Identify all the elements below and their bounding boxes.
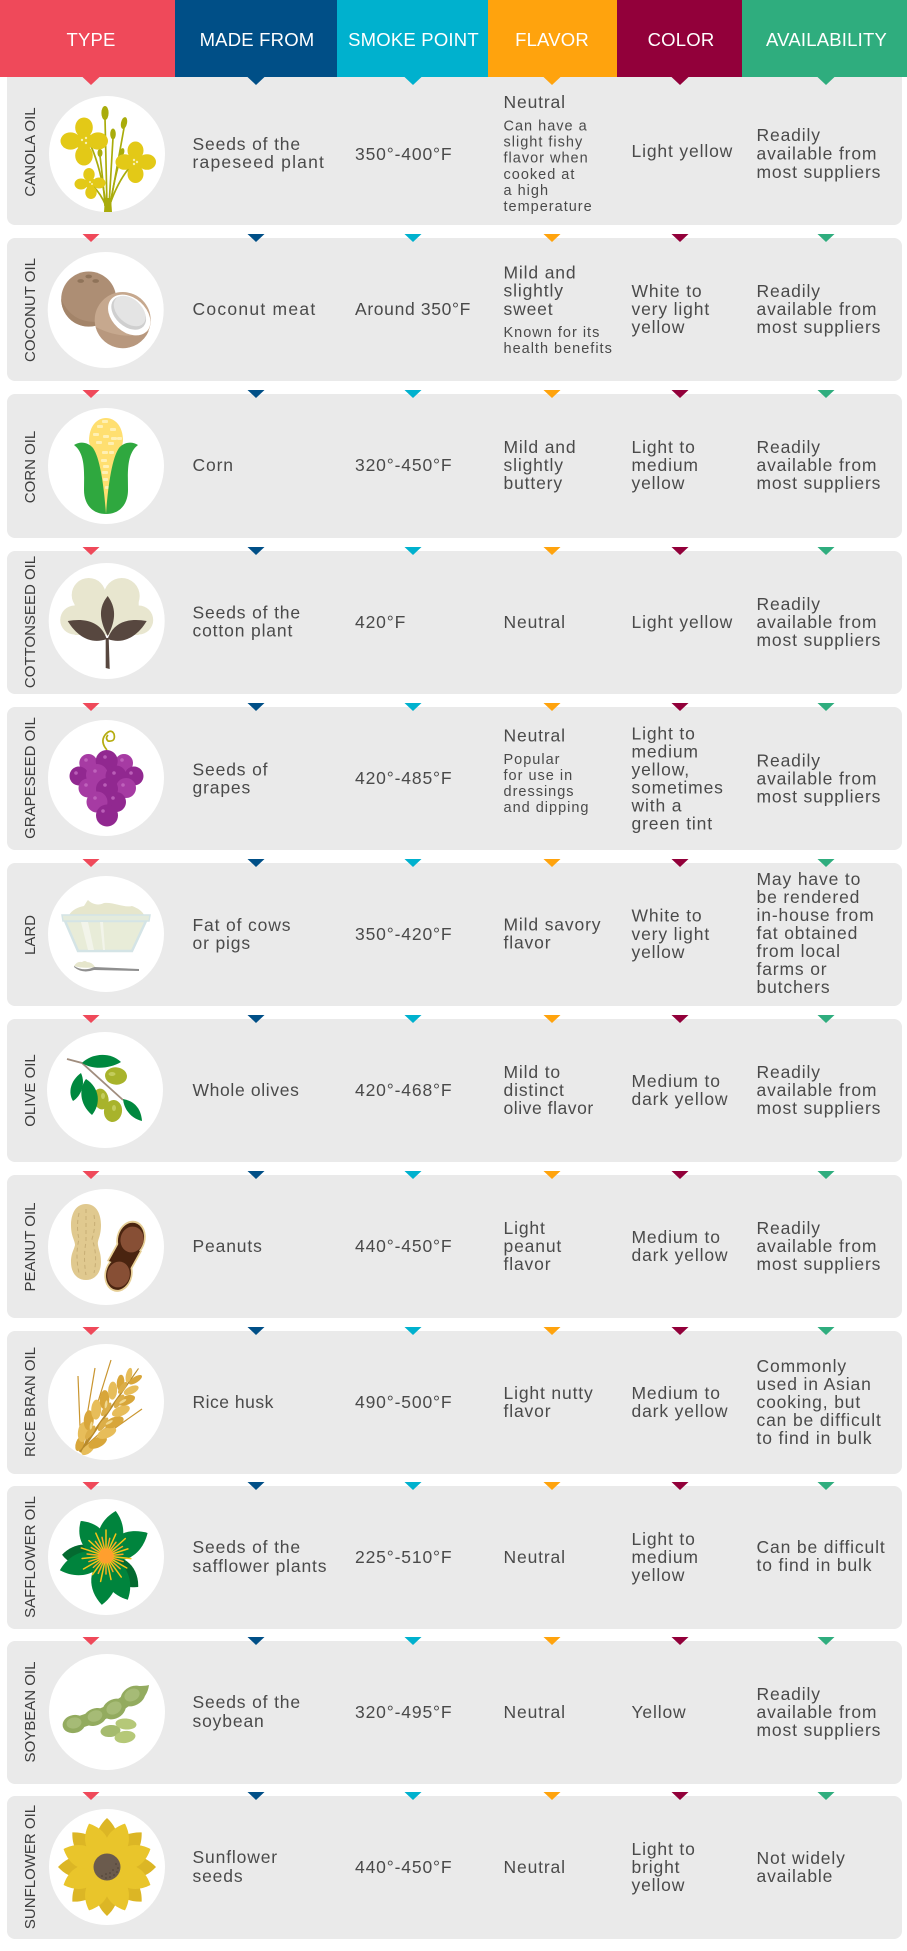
availability: Commonly (756, 1356, 847, 1376)
panel: rice bran oil (7, 1331, 902, 1474)
flavor (504, 726, 590, 816)
availability: Readily (756, 1684, 821, 1704)
color: dark yellow (632, 1089, 728, 1109)
label: rice bran oil: RICE BRAN OIL (22, 1347, 39, 1457)
made from: Rice husk (192, 1392, 274, 1412)
flavor: Light nutty (504, 1383, 594, 1403)
flavor: flavor (504, 1401, 551, 1421)
column markers: cyan, smoke point column (404, 77, 422, 1800)
column markers: red, type column (82, 77, 100, 1800)
flavor: distinct (504, 1080, 565, 1100)
made from: Peanuts (192, 1236, 263, 1256)
row: cottonseed oil (7, 551, 902, 694)
row: grapeseed oil (7, 707, 902, 850)
color: sometimes (632, 778, 724, 798)
availability: to find in bulk (756, 1428, 872, 1448)
made from: Whole olives (192, 1080, 300, 1100)
availability: most suppliers (756, 630, 881, 650)
color: green tint (632, 814, 713, 834)
flavor: Mild savory (504, 915, 601, 935)
label: corn oil: CORN OIL (22, 431, 39, 503)
label: sunflower oil: SUNFLOWER OIL (22, 1805, 39, 1929)
availability: most suppliers (756, 1720, 881, 1740)
header: color: COLOR (648, 29, 714, 50)
color: very light (632, 924, 710, 944)
label: canola oil: CANOLA OIL (22, 107, 39, 197)
header: type (0, 0, 175, 77)
icon: peanuts (48, 1189, 164, 1305)
flavor (504, 92, 593, 215)
label: cottonseed oil: COTTONSEED OIL (22, 556, 39, 688)
color: medium (632, 742, 699, 762)
availability: Readily (756, 437, 821, 457)
availability: Readily (756, 281, 821, 301)
header bar (0, 0, 907, 77)
availability: in-house from (756, 905, 875, 925)
smoke point: 350°-420°F (355, 924, 452, 944)
header: made from: MADE FROM (200, 29, 314, 50)
made from: Seeds of the (192, 602, 301, 622)
availability: most suppliers (756, 1254, 881, 1274)
made from: seeds (192, 1866, 243, 1886)
flavor: Neutral (504, 1857, 566, 1877)
color: very light (632, 299, 710, 319)
row: sunflower oil (7, 1796, 902, 1939)
availability: farms or (756, 959, 827, 979)
icon: lard bowl (48, 876, 164, 992)
icon: canola flower (49, 96, 165, 212)
header: smoke point (337, 0, 488, 77)
flavor main: Mild and (504, 262, 576, 282)
availability: available from (756, 1080, 877, 1100)
availability: Readily (756, 750, 821, 770)
flavor main: Neutral (504, 92, 566, 112)
availability: fat obtained (756, 923, 858, 943)
icon: cotton (49, 563, 165, 679)
made from: safflower plants (192, 1556, 327, 1576)
icon: safflower (48, 1499, 164, 1615)
availability: be rendered (756, 887, 860, 907)
row: lard (7, 863, 902, 1006)
row: olive oil (7, 1019, 902, 1162)
made from: rapeseed plant (192, 152, 325, 172)
availability: available from (756, 1702, 877, 1722)
color: dark yellow (632, 1245, 728, 1265)
availability: May have to (756, 869, 861, 889)
color: Light yellow (632, 141, 733, 161)
flavor: Neutral (504, 1547, 566, 1567)
flavor: flavor (504, 933, 551, 953)
smoke point: 320°-495°F (355, 1702, 452, 1722)
availability: available from (756, 1236, 877, 1256)
flavor note: Popular (504, 752, 560, 768)
row: coconut oil (7, 238, 902, 381)
flavor: Light (504, 1218, 546, 1238)
flavor: Mild and (504, 437, 576, 457)
color: Medium to (632, 1383, 721, 1403)
panel: safflower oil (7, 1486, 902, 1629)
color: Light yellow (632, 612, 733, 632)
availability: cooking, but (756, 1392, 861, 1412)
icon: coconut (48, 252, 164, 368)
color: yellow (632, 317, 685, 337)
panel: coconut oil (7, 238, 902, 381)
header: availability: AVAILABILITY (766, 29, 887, 50)
label: lard: LARD (22, 915, 39, 955)
flavor note: slight fishy (504, 135, 583, 151)
color: Light to (632, 437, 696, 457)
color: bright (632, 1857, 680, 1877)
flavor note: cooked at (504, 167, 575, 183)
color: White to (632, 906, 702, 926)
color: yellow (632, 1565, 685, 1585)
icon: sunflower (49, 1809, 165, 1925)
availability: available from (756, 612, 877, 632)
color: White to (632, 281, 702, 301)
made from: Sunflower (192, 1847, 278, 1867)
row: soybean oil (7, 1641, 902, 1784)
header: made from (175, 0, 337, 77)
icon: grapes (48, 720, 164, 836)
availability: Can be difficult (756, 1537, 886, 1557)
color: medium (632, 455, 699, 475)
availability: Readily (756, 125, 821, 145)
availability: to find in bulk (756, 1555, 872, 1575)
made from: Corn (192, 455, 234, 475)
flavor: Mild to (504, 1062, 561, 1082)
label: grapeseed oil: GRAPESEED OIL (22, 717, 39, 839)
color: Light to (632, 1529, 696, 1549)
made from: Coconut meat (192, 299, 316, 319)
flavor note: for use in (504, 768, 573, 784)
availability: most suppliers (756, 1098, 881, 1118)
flavor: buttery (504, 473, 563, 493)
column markers: burgundy, color column (672, 77, 688, 1800)
color: Light to (632, 723, 696, 743)
flavor note: flavor when (504, 151, 589, 167)
availability: available from (756, 455, 877, 475)
row: canola oil (7, 60, 902, 225)
color: Yellow (632, 1702, 687, 1722)
color: medium (632, 1547, 699, 1567)
smoke point: 420°-468°F (355, 1080, 452, 1100)
smoke point: 440°-450°F (355, 1236, 452, 1256)
flavor note: health benefits (504, 341, 613, 357)
flavor: slightly (504, 455, 564, 475)
flavor main: Neutral (504, 726, 566, 746)
color: yellow (632, 1875, 685, 1895)
color: yellow, (632, 760, 690, 780)
color: with a (630, 796, 682, 816)
availability: can be difficult (756, 1410, 882, 1430)
flavor note: and dipping (504, 800, 590, 816)
panel: grapeseed oil (7, 707, 902, 850)
color: Light to (632, 1839, 696, 1859)
row: corn oil (7, 394, 902, 538)
availability: Readily (756, 1218, 821, 1238)
flavor (504, 262, 613, 357)
availability: most suppliers (756, 786, 881, 806)
header: color (617, 0, 742, 77)
availability: used in Asian (756, 1374, 872, 1394)
label: safflower oil: SAFFLOWER OIL (22, 1496, 39, 1618)
availability: available from (756, 144, 877, 164)
panel: soybean oil (7, 1641, 902, 1784)
panel: corn oil (7, 394, 902, 538)
column markers: orange, flavor column (544, 77, 560, 1800)
made from: cotton plant (192, 620, 293, 640)
flavor main: slightly (504, 281, 564, 301)
smoke point: 225°-510°F (355, 1547, 452, 1567)
header: smoke point: SMOKE POINT (348, 29, 479, 50)
made from: Seeds of the (192, 1692, 301, 1712)
panel: olive oil (7, 1019, 902, 1162)
panel: canola oil (7, 60, 902, 225)
column markers: navy, made from column (248, 77, 264, 1800)
availability: Readily (756, 594, 821, 614)
smoke point: Around 350°F (355, 299, 471, 319)
flavor note: dressings (504, 784, 575, 800)
panel: cottonseed oil (7, 551, 902, 694)
smoke point: 420°-485°F (355, 768, 452, 788)
label: soybean oil: SOYBEAN OIL (22, 1662, 39, 1762)
smoke point: 420°F (355, 612, 406, 632)
header: flavor: FLAVOR (515, 29, 589, 50)
made from: Seeds of the (192, 134, 301, 154)
availability: available (756, 1866, 833, 1886)
flavor note: Can have a (504, 119, 588, 135)
made from: Fat of cows (192, 915, 291, 935)
availability: Readily (756, 1062, 821, 1082)
color: yellow (632, 473, 685, 493)
made from: or pigs (192, 933, 251, 953)
availability: available from (756, 768, 877, 788)
availability: Not widely (756, 1848, 846, 1868)
made from: soybean (192, 1711, 265, 1731)
smoke point: 320°-450°F (355, 455, 452, 475)
panel: lard (7, 863, 902, 1006)
availability: available from (756, 299, 877, 319)
flavor: flavor (504, 1254, 551, 1274)
availability: butchers (756, 977, 830, 997)
smoke point: 350°-400°F (355, 144, 452, 164)
color: yellow (632, 942, 685, 962)
icon: olive branch (47, 1032, 163, 1148)
flavor note: Known for its (504, 325, 600, 341)
availability: most suppliers (756, 317, 881, 337)
flavor note: temperature (504, 199, 593, 215)
row: rice bran oil (7, 1331, 902, 1474)
made from: grapes (192, 778, 251, 798)
made from: Seeds of the (192, 1537, 301, 1557)
flavor: Neutral (504, 612, 566, 632)
icon: corn (48, 408, 164, 524)
made from: Seeds of (192, 760, 268, 780)
smoke point: 440°-450°F (355, 1857, 452, 1877)
row: safflower oil (7, 1486, 902, 1629)
flavor: peanut (504, 1236, 562, 1256)
header: flavor (488, 0, 617, 77)
availability: most suppliers (756, 162, 881, 182)
flavor note: a high (504, 183, 549, 199)
label: coconut oil: COCONUT OIL (22, 258, 39, 362)
row: peanut oil (7, 1175, 902, 1318)
availability: from local (756, 941, 841, 961)
icon: rice ear (48, 1344, 164, 1465)
header: availability (742, 0, 907, 77)
label: peanut oil: PEANUT OIL (22, 1203, 39, 1291)
label: olive oil: OLIVE OIL (22, 1054, 39, 1127)
smoke point: 490°-500°F (355, 1392, 452, 1412)
icon: soybean pod (49, 1654, 165, 1770)
flavor: olive flavor (504, 1098, 594, 1118)
color: dark yellow (632, 1401, 728, 1421)
panel: sunflower oil (7, 1796, 902, 1939)
flavor: Neutral (504, 1702, 566, 1722)
flavor main: sweet (504, 299, 553, 319)
availability: most suppliers (756, 473, 881, 493)
panel: peanut oil (7, 1175, 902, 1318)
color: Medium to (632, 1071, 721, 1091)
column markers: green, availability column (818, 77, 834, 1800)
header: type: TYPE (66, 29, 116, 50)
color: Medium to (632, 1227, 721, 1247)
